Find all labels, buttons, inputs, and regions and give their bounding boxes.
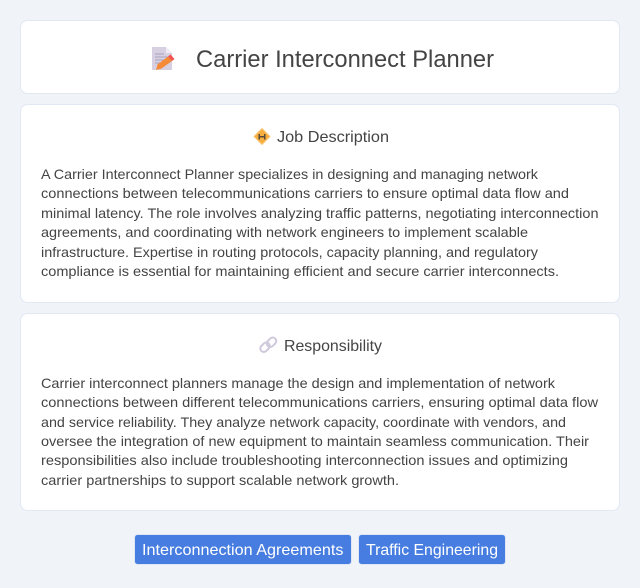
text block: responsibility: oversee the integration of new equipment to maintain seamless communication. Their — [41, 433, 589, 449]
icon: document with pencil — [152, 47, 174, 70]
heading: responsibility: Responsibility — [284, 338, 382, 355]
text block: job description: connections between telecommunications carriers to ensure optimal data flow and — [41, 185, 569, 201]
panel: responsibility — [20, 314, 620, 510]
tag: traffic engineering: Traffic Engineering — [366, 542, 498, 559]
text block: job description: A Carrier Interconnect Planner specializes in designing and managing network — [41, 166, 539, 182]
icon: diamond road sign — [254, 128, 270, 144]
tag: interconnection agreements: Interconnection Agreements — [142, 542, 344, 559]
page header panel — [20, 20, 620, 94]
text block: responsibility: and service reliability. They analyze network capacity, coordinate with vendors, and — [41, 414, 566, 430]
title: Carrier Interconnect Planner — [196, 46, 494, 73]
panel: job description — [20, 104, 620, 302]
text block: responsibility: responsibilities also include troubleshooting interconnection issues and optimizing — [41, 452, 568, 468]
text block: job description — [41, 166, 598, 279]
text block: job description: agreements, and coordinating with network engineers to implement scalable — [41, 224, 528, 240]
heading: job description: Job Description — [277, 129, 389, 146]
text block: responsibility: Carrier interconnect planners manage the design and implementation of network — [41, 375, 556, 391]
text block: job description: minimal latency. The role involves analyzing traffic patterns, negotiating interconnection — [41, 205, 598, 221]
tag: interconnection agreements — [134, 534, 352, 564]
text block: responsibility: connections between different telecommunications carriers, ensuring optimal data flow — [41, 394, 599, 410]
text block: responsibility: carrier partnerships to support scalable network growth. — [41, 472, 399, 488]
text block: job description: infrastructure. Expertise in routing protocols, capacity planning, and regulatory — [41, 244, 538, 260]
icon: chain link — [259, 336, 278, 353]
text block: job description: compliance is essential for maintaining efficient and secure carrier interconnects. — [41, 263, 559, 279]
text block: responsibility — [41, 375, 599, 488]
tag: traffic engineering — [358, 534, 506, 564]
